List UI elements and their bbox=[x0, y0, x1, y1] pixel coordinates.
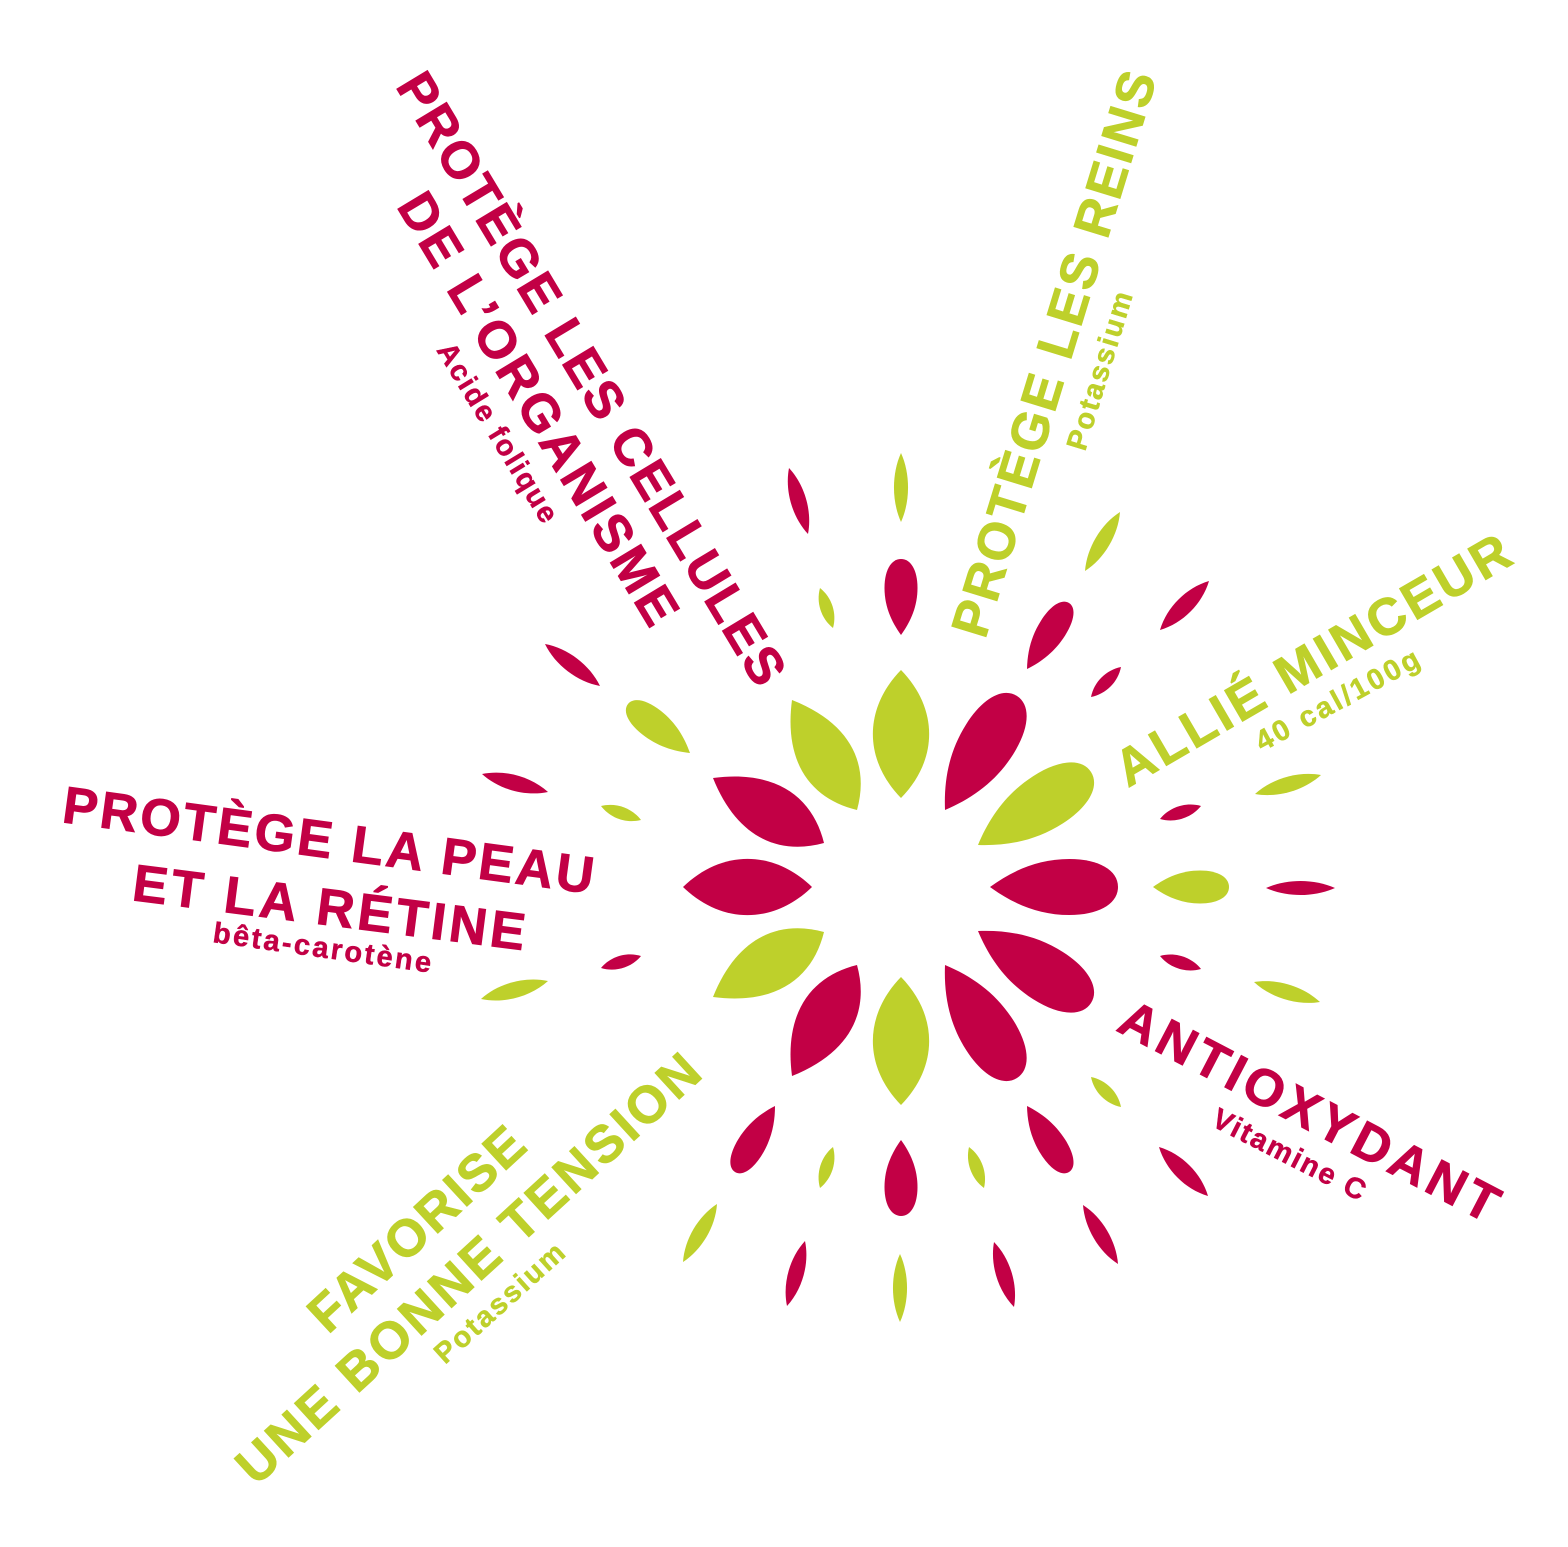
benefit: protège les cellules de l'organisme: DE L’ORGANISME bbox=[386, 182, 690, 636]
flower: outer scattered petals bbox=[479, 453, 1335, 1322]
benefit: antioxydant: Vitamine C bbox=[1207, 1103, 1371, 1208]
benefit: antioxydant: ANTIOXYDANT bbox=[1109, 989, 1509, 1235]
benefit: favorise une bonne tension: Potassium bbox=[428, 1237, 572, 1370]
benefit: allié minceur: ALLIÉ MINCEUR bbox=[1105, 523, 1521, 798]
benefit: protège les reins: Potassium bbox=[1061, 288, 1140, 454]
benefit: protège les reins: PROTÈGE LES REINS bbox=[941, 64, 1168, 644]
flower: inner ring of petals bbox=[683, 670, 1118, 1105]
benefit: protège la peau et la rétine bbox=[59, 776, 597, 980]
benefit: favorise une bonne tension: FAVORISE bbox=[297, 1115, 537, 1344]
benefit: allié minceur: 40 cal/100g bbox=[1250, 643, 1425, 758]
benefit: protège la peau et la rétine: ET LA RÉTINE bbox=[129, 854, 529, 962]
benefit: protège les cellules de l'organisme: Acide folique bbox=[430, 337, 564, 529]
benefit: protège la peau et la rétine: PROTÈGE LA PEAU bbox=[59, 776, 597, 906]
benefit: favorise une bonne tension: UNE BONNE TENSION bbox=[225, 1042, 712, 1496]
benefit: protège la peau et la rétine: bêta-carotène bbox=[211, 917, 433, 980]
benefit: protège les cellules de l'organisme: PROTÈGE LES CELLULES bbox=[385, 62, 797, 696]
